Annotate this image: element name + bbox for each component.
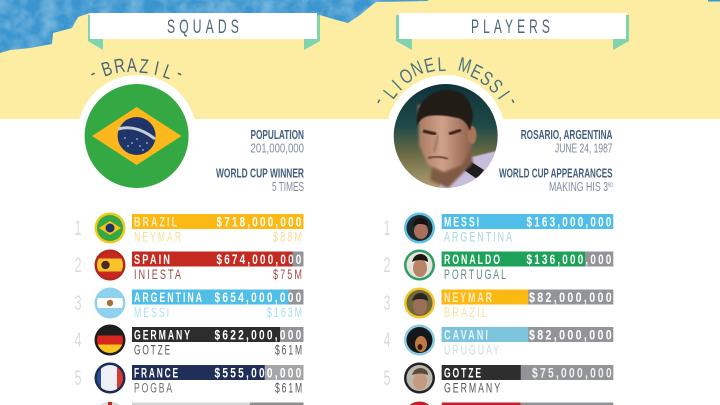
- row: Argentina: $654,000,000: [214, 290, 304, 305]
- background: sand band: [0, 0, 720, 119]
- photo: Lionel Messi: [386, 75, 506, 190]
- text: population: POPULATION: [250, 128, 304, 142]
- row: Germany: GOTZE: [134, 343, 172, 358]
- heading: Lionel Messi curved: L: [379, 82, 402, 103]
- heading: Lionel Messi curved: -: [366, 93, 389, 108]
- ranks: squads: 4: [74, 329, 82, 352]
- heading: Brazil curved: -: [85, 61, 100, 84]
- heading: Lionel Messi curved: M: [456, 53, 474, 78]
- text: world cup appearances: WORLD CUP APPEARANCES: [499, 166, 612, 180]
- icon: Spain flag: [94, 250, 126, 280]
- row: Brazil: NEYMAR: [134, 230, 183, 245]
- text: birthplace and date: ROSARIO, ARGENTINA: [521, 128, 612, 142]
- heading: Lionel Messi curved: E: [422, 53, 437, 77]
- row: Messi: $163,000,000: [526, 214, 614, 230]
- heading: Brazil curved: R: [112, 54, 127, 78]
- text: world cup appearances: MAKING HIS 3: [549, 180, 608, 194]
- heading: Lionel Messi curved: [366, 53, 526, 108]
- row: Argentina: $163M: [267, 305, 304, 320]
- row: Spain: $674,000,000: [216, 252, 304, 267]
- row: Spain: SPAIN: [134, 252, 172, 267]
- row: Cavani: URUGUAY: [444, 343, 501, 358]
- row: Neymar: [404, 288, 614, 320]
- text: birthplace and date: JUNE 24, 1987: [555, 142, 613, 156]
- heading: Lionel Messi curved: O: [395, 64, 417, 89]
- text: world cup winner: 5 TIMES: [272, 180, 304, 194]
- row: Brazil: $718,000,000: [216, 214, 304, 230]
- row: sixth player, cut off: [410, 402, 613, 405]
- row: Neymar: $82,000,000: [529, 290, 614, 305]
- text: world cup winner: WORLD CUP WINNER: [216, 166, 304, 180]
- row: France: FRANCE: [134, 366, 180, 380]
- icon: Ronaldo portrait: [404, 250, 435, 280]
- row: France: $555,000,000: [214, 366, 304, 380]
- heading: Brazil curved: Z: [138, 55, 150, 78]
- heading: Brazil curved: A: [126, 54, 137, 77]
- panel: squads: [74, 13, 320, 405]
- heading: Lionel Messi curved: -: [503, 93, 526, 108]
- icon: France flag: [94, 362, 126, 394]
- row: France: [94, 362, 304, 396]
- text: world cup winner: [216, 166, 304, 194]
- ranks: squads: 1: [74, 217, 82, 240]
- banner: players: PLAYERS: [471, 17, 554, 38]
- row: Neymar: BRAZIL: [444, 305, 489, 320]
- background: water: [0, 0, 720, 53]
- banner: squads: SQUADS: [167, 17, 243, 38]
- heading: Lionel Messi curved: S: [476, 66, 497, 91]
- row: Gotze: [404, 362, 614, 396]
- text: population: [250, 128, 304, 156]
- icon: Argentina flag: [94, 288, 126, 318]
- row: Brazil: [94, 212, 304, 245]
- row: Germany: $622,000,000: [214, 328, 304, 342]
- row: Cavani: [404, 324, 614, 358]
- ranks: squads: [74, 217, 82, 390]
- row: Cavani: CAVANI: [444, 328, 490, 342]
- text: birthplace and date: [521, 128, 613, 156]
- row: Brazil: BRAZIL: [134, 214, 179, 230]
- row: Argentina: [94, 288, 304, 320]
- heading: Brazil curved: I: [152, 57, 161, 80]
- row: Ronaldo: $136,000,000: [526, 252, 614, 267]
- row: Germany: GERMANY: [134, 328, 192, 342]
- icon: Gotze portrait: [404, 362, 435, 394]
- ranks: squads: 5: [74, 367, 82, 390]
- row: Messi: ARGENTINA: [444, 230, 514, 245]
- ranks: squads: 3: [74, 292, 82, 315]
- row: Gotze: GOTZE: [444, 366, 483, 380]
- row: Ronaldo: RONALDO: [444, 252, 502, 267]
- heading: Lionel Messi curved: E: [467, 60, 486, 84]
- heading: Brazil curved: B: [99, 56, 115, 81]
- row: Messi: MESSI: [444, 214, 481, 230]
- row: Brazil: $88M: [273, 230, 304, 245]
- row: sixth squad, cut off: [100, 402, 304, 405]
- text: world cup appearances: RD: [608, 183, 613, 189]
- icon: Brazil flag large: [77, 75, 197, 188]
- ranks: squads: 2: [74, 254, 82, 277]
- ranks: players: 5: [384, 367, 390, 390]
- ranks: players: 4: [384, 329, 391, 352]
- ranks: players: 3: [384, 292, 390, 315]
- row: France: POGBA: [134, 381, 174, 396]
- row: Spain: INIESTA: [134, 267, 183, 282]
- heading: Lionel Messi curved: S: [484, 75, 507, 98]
- icon: Neymar portrait: [404, 288, 435, 318]
- row: Argentina: ARGENTINA: [134, 290, 204, 305]
- ranks: players: 2: [384, 254, 390, 277]
- heading: Brazil curved: [85, 54, 188, 84]
- icon: Germany flag: [94, 324, 126, 356]
- row: Spain: [94, 250, 304, 282]
- row: Messi: [404, 212, 614, 245]
- heading: Brazil curved: -: [173, 62, 188, 84]
- banner: squads: [88, 13, 320, 50]
- panel: players: [366, 13, 629, 405]
- row: Argentina: MESSI: [134, 305, 171, 320]
- text: population: 201,000,000: [250, 142, 304, 156]
- heading: Lionel Messi curved: I: [387, 76, 406, 95]
- heading: Lionel Messi curved: I: [493, 87, 514, 103]
- row: Ronaldo: PORTUGAL: [444, 267, 508, 282]
- row: Germany: [94, 324, 304, 358]
- text: world cup appearances: [499, 166, 613, 194]
- row: France: $61M: [275, 381, 304, 396]
- row: Neymar: NEYMAR: [444, 290, 494, 305]
- heading: Brazil curved: L: [160, 60, 176, 84]
- ranks: players: [384, 217, 391, 390]
- row: Gotze: $75,000,000: [532, 366, 614, 380]
- banner: players: [396, 13, 629, 50]
- row: Germany: $61M: [275, 343, 304, 358]
- icon: Cavani portrait: [404, 324, 435, 356]
- icon: Messi portrait: [404, 212, 435, 244]
- row: Cavani: $82,000,000: [529, 328, 614, 342]
- heading: Lionel Messi curved: N: [407, 56, 426, 81]
- ranks: players: 1: [384, 217, 390, 240]
- row: Spain: $75M: [273, 267, 304, 282]
- row: Ronaldo: [404, 250, 614, 282]
- heading: Lionel Messi curved: L: [437, 53, 447, 76]
- row: Gotze: GERMANY: [444, 381, 502, 396]
- icon: Brazil flag: [94, 212, 126, 244]
